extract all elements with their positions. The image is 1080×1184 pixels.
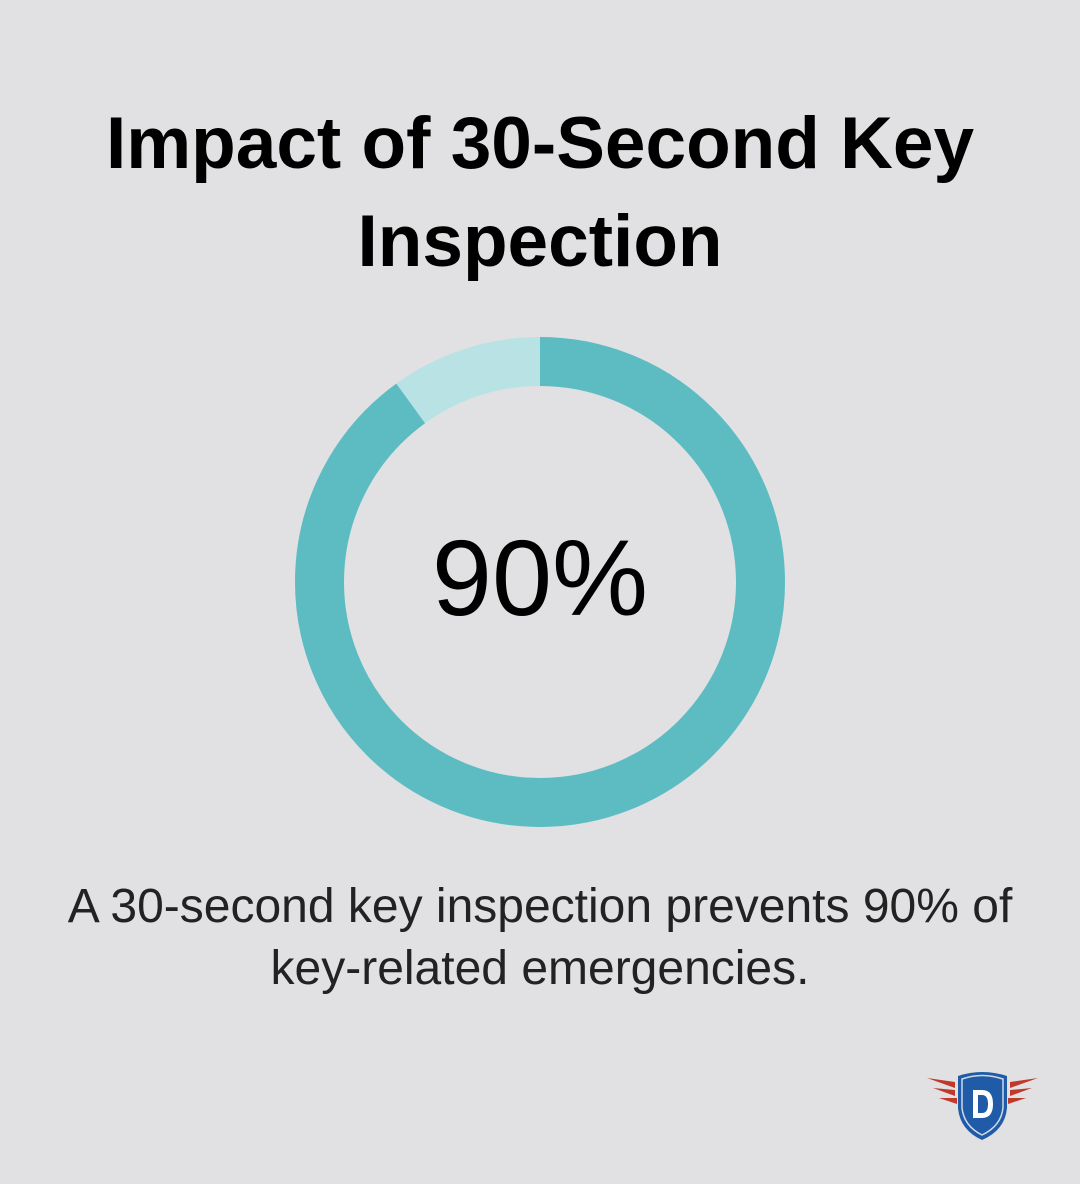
icon: logo — [927, 1072, 1038, 1140]
title — [106, 103, 974, 282]
stat value: 90% — [432, 517, 648, 638]
description: A 30-second key inspection prevents 90% of — [68, 880, 1012, 933]
title: Impact of 30-Second Key — [106, 103, 974, 184]
title: Inspection — [357, 201, 723, 282]
description: key-related emergencies. — [271, 942, 809, 995]
description — [68, 880, 1012, 995]
